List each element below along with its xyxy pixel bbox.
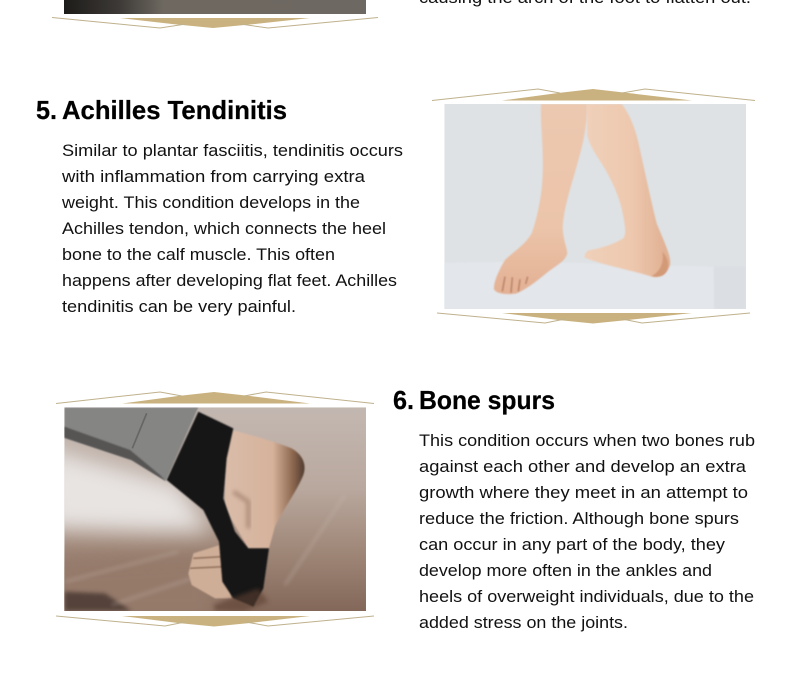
toes	[502, 277, 528, 293]
ornament: gold divider under previous photo	[52, 18, 378, 28]
text block: Bone spurs description: reduce the friction. Although bone spurs	[419, 509, 739, 528]
trouser leg	[64, 407, 198, 481]
text block: Bone spurs description: growth where they meet in an attempt to	[419, 483, 748, 502]
heading: 5. Achilles Tendinitis: Achilles Tendinitis	[62, 95, 287, 125]
text block: Achilles Tendinitis description: weight. This condition develops in the	[61, 193, 360, 212]
heel skin	[225, 430, 305, 548]
text block: Bone spurs description: added stress on the joints.	[419, 613, 628, 632]
text block: Achilles Tendinitis description: happens after developing flat feet. Achilles	[62, 271, 397, 290]
text block: Achilles Tendinitis description: Achilles tendon, which connects the heel	[62, 219, 386, 238]
toes	[188, 544, 232, 598]
text block: Bone spurs description	[419, 431, 755, 632]
photo: taped heel on wooden floor	[64, 407, 366, 611]
rear leg and raised foot	[584, 104, 670, 277]
text block: Bone spurs description: can occur in any part of the body, they	[419, 535, 726, 554]
white block	[444, 262, 714, 309]
text block: Achilles Tendinitis description: tendinitis can be very painful.	[62, 297, 296, 316]
wood floor lower left	[64, 548, 216, 611]
text block: Bone spurs description: This condition occurs when two bones rub	[419, 431, 755, 450]
text block: Achilles Tendinitis description	[61, 141, 403, 316]
ornament: gold divider below legs photo	[437, 313, 750, 324]
bright floor reflection	[45, 448, 212, 532]
text block: Achilles Tendinitis description: with inflammation from carrying extra	[61, 167, 366, 186]
text block: Bone spurs description: against each other and develop an extra	[419, 457, 747, 476]
text block: Achilles Tendinitis description: bone to the calf muscle. This often	[62, 245, 335, 264]
text block: Achilles Tendinitis description: Similar to plantar fasciitis, tendinitis occurs	[62, 141, 403, 160]
heading: 5. Achilles Tendinitis: 5.	[36, 95, 57, 125]
photo: legs stepping on a white block	[444, 104, 746, 309]
heading: 6. Bone spurs: Bone spurs	[419, 385, 555, 415]
ornament: gold divider above legs photo	[432, 89, 755, 100]
photo strip: previous section image	[64, 0, 366, 14]
front leg and foot	[494, 104, 587, 294]
text block: Bone spurs description: develop more often in the ankles and	[419, 561, 712, 580]
heading: 6. Bone spurs: 6.	[393, 385, 414, 415]
ornament: gold divider above foot photo	[56, 392, 374, 404]
ornament: gold divider below foot photo	[56, 616, 374, 626]
text block: Bone spurs description: heels of overweight individuals, due to the	[419, 587, 754, 606]
black support sleeve	[167, 412, 269, 607]
